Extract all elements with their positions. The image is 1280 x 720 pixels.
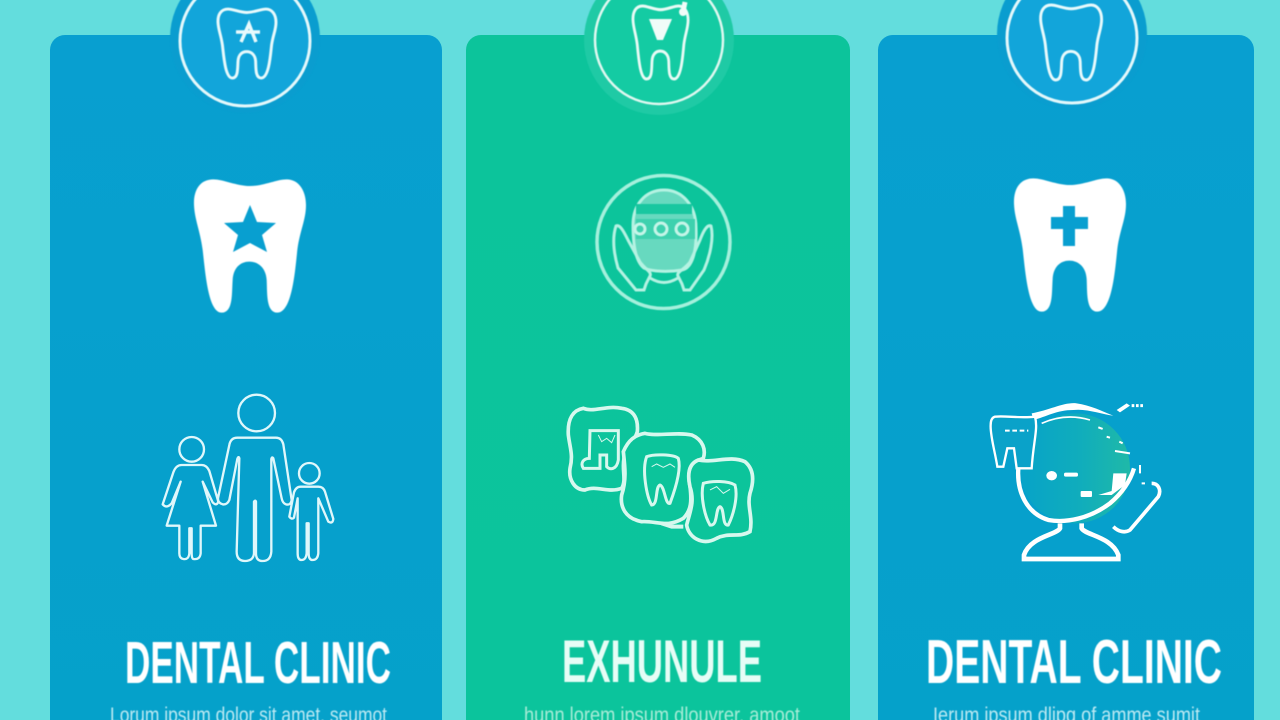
icon: three teeth in frames xyxy=(568,407,753,541)
icon: head held by hands in ring xyxy=(597,176,730,308)
heading: dental clinic: DENTAL CLINIC xyxy=(125,630,391,696)
panel: exhunule center xyxy=(466,0,850,720)
icon: family outline xyxy=(163,395,333,561)
icon: solid tooth with star xyxy=(194,179,306,313)
heading: exhunule: EXHUNULE xyxy=(562,628,762,695)
icon: top badge with tooth xyxy=(584,0,734,115)
icon: top badge with tooth xyxy=(997,0,1147,109)
panel background xyxy=(878,35,1254,720)
icon: top badge with tooth xyxy=(170,0,320,113)
panel background xyxy=(466,35,850,720)
panel: dental clinic left xyxy=(50,0,442,720)
panel background xyxy=(50,35,442,720)
panel: dental clinic right xyxy=(878,0,1254,720)
icon: globe with tooth and brush xyxy=(991,403,1160,559)
icon: solid tooth with cross xyxy=(1014,178,1126,312)
